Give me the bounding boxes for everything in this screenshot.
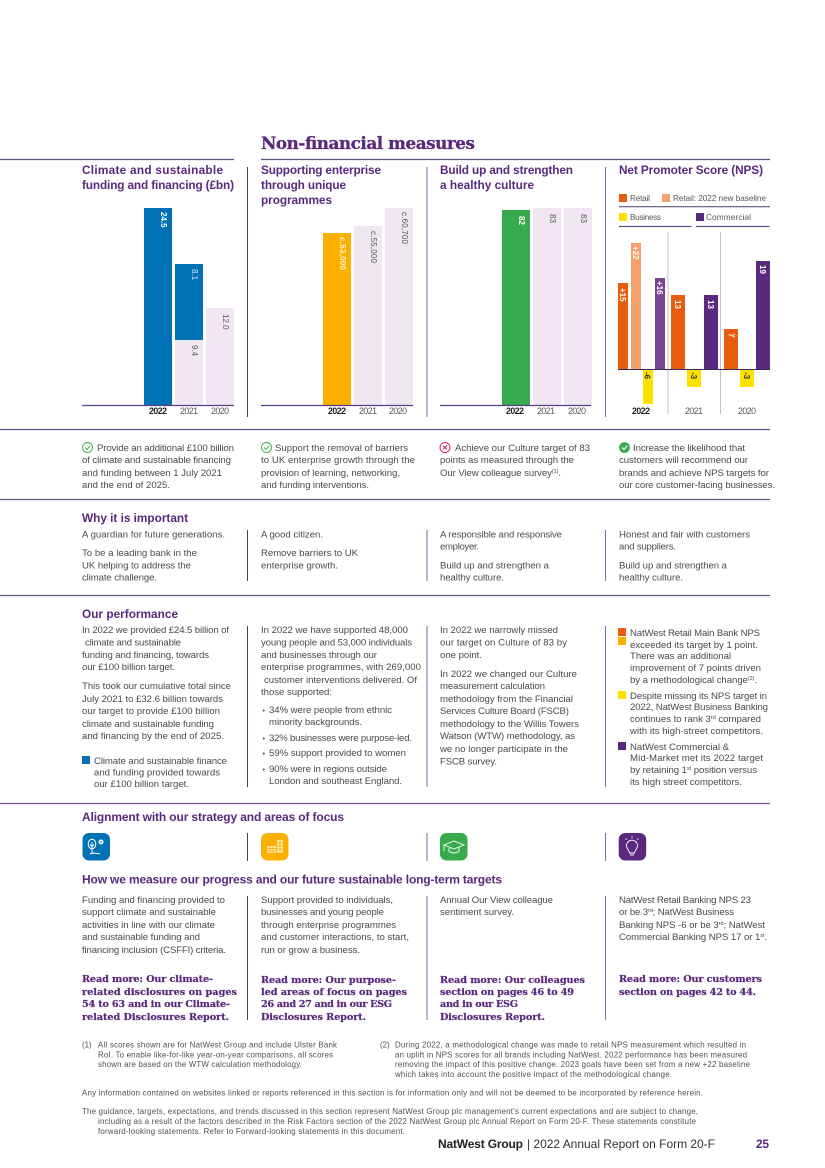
text: why NPS: Honest and fair with customers bbox=[619, 530, 750, 540]
bar chart: enterprise: 2022 bbox=[328, 406, 346, 416]
text: performance NPS: Mid-Market met its 2022 target bbox=[630, 753, 763, 764]
read more: climate: related Disclosures Report. bbox=[82, 1012, 229, 1023]
bar chart: climate funding bbox=[82, 208, 234, 416]
target: culture: Achieve our Culture target of 83 bbox=[455, 443, 590, 454]
text: why NPS: and suppliers. bbox=[619, 542, 676, 552]
bar chart: enterprise: c.60,700 bbox=[400, 212, 409, 245]
panel: culture chart bbox=[440, 163, 592, 416]
column: measure climate: support climate and sustainable bbox=[82, 907, 216, 918]
bar chart: NPS bbox=[618, 232, 770, 416]
legend: climate finance: our £100 billion target. bbox=[94, 779, 189, 790]
heading: culture: Build up and strengthen bbox=[440, 163, 573, 177]
heading: alignment: Alignment with our strategy and areas of focus bbox=[82, 810, 344, 824]
target: NPS bbox=[619, 442, 775, 491]
bar chart: climate funding: 24.5 bbox=[159, 212, 168, 228]
text: performance NPS: . bbox=[754, 675, 757, 686]
read more: customers: section on pages 42 to 44. bbox=[619, 987, 756, 998]
read more: climate: 54 to 63 and in our Climate- bbox=[82, 999, 230, 1010]
target: culture: . bbox=[558, 468, 561, 479]
target: enterprise bbox=[261, 442, 415, 491]
text: performance enterprise: • bbox=[262, 708, 266, 715]
column: measure climate: activities in line with our climate bbox=[82, 920, 215, 931]
footer bbox=[438, 1137, 769, 1151]
column: measure climate bbox=[82, 895, 238, 1023]
column: measure culture bbox=[440, 895, 586, 1023]
text: performance enterprise: and businesses through our bbox=[261, 650, 378, 661]
bar chart: culture: 83 bbox=[579, 214, 588, 223]
text: why enterprise: enterprise growth. bbox=[261, 560, 338, 572]
target: NPS: customers will recommend our bbox=[619, 455, 749, 466]
text: performance NPS: rd bbox=[711, 715, 716, 721]
bar chart: NPS: -3 bbox=[689, 372, 698, 380]
read more: culture: and in our ESG bbox=[440, 999, 518, 1010]
bar chart: climate funding: 12.0 bbox=[221, 314, 230, 330]
read more: enterprise: Read more: Our purpose- bbox=[261, 975, 396, 986]
bar chart: NPS: 2022 bbox=[632, 406, 650, 416]
footnote 2: which takes into account the positive impact of the methodological change. bbox=[394, 1070, 672, 1079]
text: why climate: climate challenge. bbox=[82, 572, 157, 584]
column: measure NPS: ; NatWest Business bbox=[653, 907, 734, 918]
target: climate: of climate and sustainable financing bbox=[82, 455, 231, 466]
bar chart: culture: 2021 bbox=[537, 406, 555, 416]
text: why culture: A responsible and responsive bbox=[440, 530, 562, 540]
bar chart: culture: 2022 bbox=[506, 406, 524, 416]
bar chart: NPS: 2021 bbox=[685, 406, 703, 416]
text: why culture bbox=[440, 530, 562, 584]
heading: culture bbox=[440, 163, 573, 192]
text: performance climate: In 2022 we provided £24.5 billion of bbox=[82, 625, 229, 636]
icon: tick outline bbox=[262, 442, 272, 452]
bar chart: NPS: 13 bbox=[706, 300, 715, 309]
bar chart: NPS: 13 bbox=[673, 300, 682, 309]
text: performance enterprise: • bbox=[262, 767, 266, 774]
footnote 2: During 2022, a methodological change was made to retail NPS measurement which resulted in bbox=[395, 1041, 746, 1050]
read more: customers bbox=[619, 974, 763, 998]
text: performance NPS: 2022, NatWest Business Banking bbox=[630, 702, 768, 713]
bar chart: NPS: +15 bbox=[618, 288, 627, 302]
text: performance culture: In 2022 we changed our Culture bbox=[440, 669, 577, 680]
read more: customers: Read more: Our customers bbox=[619, 974, 763, 985]
column: measure NPS: Banking NPS -6 or be 3 bbox=[619, 920, 719, 931]
chart legend: Retail bbox=[630, 194, 650, 203]
bar chart: culture: 2020 bbox=[568, 406, 586, 416]
text: why culture: healthy culture. bbox=[440, 572, 504, 584]
footnote 2: an uplift in NPS scores for all brands including NatWest. 2022 performance has been measured bbox=[395, 1050, 747, 1060]
bar chart: climate funding: 2020 bbox=[211, 406, 229, 416]
text: why enterprise: Remove barriers to UK bbox=[261, 548, 359, 559]
bar chart: culture: 82 bbox=[517, 216, 526, 225]
column: measure enterprise: Support provided to individuals, bbox=[261, 895, 393, 906]
target: NPS: brands and achieve NPS targets for bbox=[619, 468, 770, 479]
text: performance climate bbox=[82, 625, 231, 790]
panel: climate chart bbox=[82, 163, 234, 416]
column: measure NPS: . bbox=[764, 932, 767, 943]
footnotes bbox=[82, 1041, 751, 1136]
column: measure NPS: ; NatWest bbox=[723, 920, 765, 931]
column: measure NPS: Commercial Banking NPS 17 or 1 bbox=[619, 932, 760, 943]
target: climate bbox=[82, 442, 234, 491]
text: performance culture: FSCB survey. bbox=[440, 757, 497, 768]
text: performance culture: methodology to the Willis Towers bbox=[440, 719, 579, 730]
forward-looking statement bbox=[82, 1107, 698, 1136]
read more: climate: Read more: Our climate- bbox=[82, 974, 213, 985]
bar chart: enterprise: 2021 bbox=[359, 406, 377, 416]
target: climate: and funding between 1 July 2021 bbox=[82, 468, 222, 479]
text: performance NPS: by retaining 1 bbox=[630, 765, 687, 776]
footnote 2: removing the impact of this positive change. 2023 goals have been set from a new +22 baseline bbox=[395, 1060, 751, 1069]
read more: enterprise: led areas of focus on pages bbox=[261, 987, 408, 998]
read more: climate: related disclosures on pages bbox=[82, 987, 238, 998]
bar chart: culture bbox=[440, 208, 592, 416]
text: performance climate: This took our cumulative total since bbox=[82, 681, 231, 692]
target: enterprise: Support the removal of barriers bbox=[275, 443, 408, 454]
text: performance culture bbox=[439, 625, 579, 768]
text: why NPS: Build up and strengthen a bbox=[619, 560, 728, 572]
text: performance climate: and financing by the end of 2025. bbox=[82, 731, 224, 742]
heading: climate bbox=[82, 163, 234, 192]
text: why climate: A guardian for future generations. bbox=[82, 530, 225, 540]
text: performance culture: we no longer participate in the bbox=[439, 744, 568, 755]
icon: tick filled bbox=[619, 442, 630, 453]
icon: customers light bulb bbox=[619, 833, 646, 860]
horizontal rules bbox=[0, 160, 770, 804]
footnote 2: (2) bbox=[380, 1041, 390, 1050]
icon: tick outline bbox=[82, 442, 92, 452]
column: measure enterprise: businesses and young people bbox=[261, 907, 384, 918]
target: climate: Provide an additional £100 billion bbox=[97, 443, 234, 454]
text: performance enterprise bbox=[261, 625, 421, 787]
heading: enterprise: through unique bbox=[261, 178, 346, 192]
bar chart: climate funding: 2022 bbox=[149, 406, 167, 416]
text: performance climate: July 2021 to £32.6 billion towards bbox=[82, 694, 223, 705]
bar chart: climate funding: 9.4 bbox=[190, 345, 199, 357]
column: measure culture: Annual Our View colleague bbox=[440, 895, 553, 906]
footnote 1 bbox=[82, 1041, 337, 1069]
heading: why it is important: Why it is important bbox=[82, 511, 188, 525]
text: why NPS: healthy culture. bbox=[619, 572, 683, 584]
text: performance culture: Services Culture Board (FSCB) bbox=[440, 706, 569, 717]
target: culture bbox=[440, 442, 590, 479]
text: performance enterprise: customer interventions delivered. Of bbox=[264, 675, 417, 686]
read more: culture: Read more: Our colleagues bbox=[440, 975, 586, 986]
text: performance enterprise: • bbox=[262, 751, 266, 758]
heading: culture: a healthy culture bbox=[440, 178, 534, 192]
text: performance NPS: NatWest Commercial & bbox=[630, 742, 730, 753]
text: performance enterprise: 59% support provided to women bbox=[269, 748, 406, 759]
text: performance culture: Watson (WTW) methodology, as bbox=[440, 731, 575, 742]
bar chart: enterprise: c.53,000 bbox=[338, 237, 347, 271]
column dividers bbox=[248, 167, 606, 1020]
column: measure culture: sentiment survey. bbox=[440, 907, 514, 918]
disclaimer: Any information contained on websites linked or reports referenced in this section is for information only and will not be deemed to be incorporated by reference herein. bbox=[82, 1089, 703, 1098]
column: measure enterprise bbox=[261, 895, 409, 1023]
column: measure climate: Funding and financing provided to bbox=[82, 895, 225, 906]
column: measure NPS: st bbox=[760, 933, 765, 939]
heading: enterprise bbox=[261, 163, 381, 207]
column: measure enterprise: and customer interactions, to start, bbox=[261, 932, 409, 943]
bar chart: NPS: +16 bbox=[655, 281, 664, 295]
forward-looking statement: forward-looking statements. Refer to Forward-looking statements in this document. bbox=[98, 1127, 405, 1136]
column: measure enterprise: run or grow a business. bbox=[261, 945, 360, 956]
column: measure climate: and sustainable funding and bbox=[82, 932, 200, 943]
text: performance NPS: exceeded its target by 1 point. bbox=[630, 640, 758, 651]
text: performance culture: our target on Culture of 83 by bbox=[440, 637, 567, 648]
forward-looking statement: including as a result of the factors described in the Risk Factors section of the 2022 NatWest Group plc Annual Report on Form 20-F. These statements constitute bbox=[98, 1117, 697, 1126]
column: measure NPS: NatWest Retail Banking NPS 23 bbox=[619, 895, 751, 906]
target: NPS: Increase the likelihood that bbox=[633, 443, 745, 454]
text: performance climate: climate and sustainable bbox=[85, 637, 181, 648]
footer: NatWest Group bbox=[438, 1137, 523, 1151]
text: performance NPS: its high street competitors. bbox=[630, 777, 742, 788]
bar chart: culture: 83 bbox=[548, 214, 557, 223]
title: Non-financial measures bbox=[261, 133, 475, 153]
legend: climate finance bbox=[82, 756, 227, 790]
text: why climate: UK helping to address the bbox=[82, 560, 191, 572]
column: measure climate: financing inclusion (CSFFI) criteria. bbox=[82, 945, 226, 956]
heading: climate: funding and financing (£bn) bbox=[82, 178, 234, 192]
legend: climate finance: and funding provided towards bbox=[94, 768, 220, 779]
read more: enterprise: Disclosures Report. bbox=[261, 1012, 366, 1023]
panel: how we measure bbox=[82, 872, 767, 1023]
heading: enterprise: programmes bbox=[261, 193, 332, 207]
bar chart: NPS: -3 bbox=[742, 372, 751, 380]
text: performance NPS: There was an additional bbox=[630, 651, 731, 662]
read more: enterprise bbox=[261, 975, 408, 1023]
bar chart: climate funding: 8.1 bbox=[190, 269, 199, 281]
target: climate: and the end of 2025. bbox=[82, 480, 170, 491]
target: NPS: our core customer-facing businesses. bbox=[619, 480, 775, 491]
target: culture: (1) bbox=[552, 469, 559, 475]
text: performance NPS: (2) bbox=[748, 676, 755, 682]
read more: culture: section on pages 46 to 49 bbox=[440, 987, 574, 998]
read more: enterprise: 26 and 27 and in our ESG bbox=[261, 999, 392, 1010]
text: performance enterprise: those supported: bbox=[261, 687, 332, 698]
text: performance enterprise: 34% were people from ethnic bbox=[269, 705, 392, 716]
column: measure enterprise: through enterprise programmes bbox=[261, 920, 396, 931]
text: performance culture: In 2022 we narrowly missed bbox=[440, 625, 558, 636]
text: performance enterprise: In 2022 we have supported 48,000 bbox=[261, 625, 408, 636]
text: performance climate: our £100 billion target. bbox=[82, 662, 175, 673]
text: why NPS bbox=[619, 530, 750, 584]
target: enterprise: to UK enterprise growth through the bbox=[261, 455, 415, 466]
text: performance NPS: Despite missing its NPS target in bbox=[630, 691, 767, 702]
chart legend: Business bbox=[630, 213, 661, 222]
text: why climate: To be a leading bank in the bbox=[82, 548, 197, 559]
forward-looking statement: The guidance, targets, expectations, and trends discussed in this section represent NatWest Group plc management’s current expectations and are subject to change, bbox=[82, 1107, 698, 1116]
icon: cross outline bbox=[440, 442, 450, 452]
heading: our performance: Our performance bbox=[82, 607, 178, 621]
footnote 1: RoI. To enable like-for-like year-on-year comparisons, all scores bbox=[98, 1050, 333, 1060]
bar chart: enterprise: c.55,000 bbox=[369, 231, 378, 264]
text: why enterprise bbox=[261, 530, 359, 572]
text: performance enterprise: young people and 53,000 individuals bbox=[261, 637, 412, 648]
read more: culture: Disclosures Report. bbox=[440, 1012, 545, 1023]
text: performance NPS: st bbox=[687, 766, 692, 772]
panel: enterprise chart bbox=[261, 163, 413, 416]
text: performance culture: methodology from the Financial bbox=[440, 694, 573, 705]
column: measure NPS: rd bbox=[719, 921, 724, 927]
bar chart: NPS: +22 bbox=[631, 246, 640, 260]
text: performance enterprise: minority backgrounds. bbox=[269, 717, 362, 728]
text: performance climate: our target to provide £100 billion bbox=[82, 706, 220, 717]
text: performance NPS: continues to rank 3 bbox=[630, 714, 711, 725]
bar chart: NPS: 7 bbox=[726, 333, 736, 338]
bar chart: NPS: -6 bbox=[642, 372, 652, 380]
heading: climate: Climate and sustainable bbox=[82, 163, 223, 177]
panel: NPS chart bbox=[618, 163, 770, 416]
bar chart: enterprise bbox=[261, 208, 413, 416]
chart legend: Retail: 2022 new baseline bbox=[673, 194, 766, 203]
icon: climate tree and gear bbox=[82, 833, 110, 860]
icon: enterprise buildings bbox=[261, 833, 288, 860]
read more: climate bbox=[82, 974, 238, 1023]
target: culture: points as measured through the bbox=[440, 455, 574, 466]
chart legend bbox=[619, 194, 770, 226]
column: measure NPS: or be 3 bbox=[619, 907, 648, 918]
footnote 1: (1) bbox=[82, 1041, 92, 1050]
heading: NPS: Net Promoter Score (NPS) bbox=[619, 163, 763, 177]
text: performance enterprise: • bbox=[262, 736, 266, 743]
footnote 2 bbox=[380, 1041, 751, 1079]
footnote 1: shown are based on the WTW calculation methodology. bbox=[98, 1060, 302, 1069]
text: performance culture: measurement calculation bbox=[440, 681, 545, 692]
text: performance NPS: position versus bbox=[691, 765, 757, 776]
target: enterprise: and funding interventions. bbox=[261, 480, 369, 491]
footer: | 2022 Annual Report on Form 20-F bbox=[527, 1137, 715, 1151]
text: performance NPS bbox=[618, 628, 768, 788]
page number: 25 bbox=[756, 1137, 769, 1151]
heading: enterprise: Supporting enterprise bbox=[261, 163, 381, 177]
panel: targets bbox=[82, 442, 775, 491]
text: why culture: employer. bbox=[440, 542, 479, 552]
read more: culture bbox=[440, 975, 586, 1023]
icon: culture graduation cap bbox=[440, 833, 468, 860]
text: performance enterprise: enterprise programmes, with 269,000 bbox=[261, 662, 421, 673]
footnote 1: All scores shown are for NatWest Group and include Ulster Bank bbox=[98, 1041, 337, 1050]
text: performance climate: funding and financing, towards bbox=[82, 650, 209, 661]
text: performance climate: climate and sustainable funding bbox=[82, 719, 214, 730]
column: measure NPS: rd bbox=[648, 908, 653, 914]
text: performance NPS: compared bbox=[716, 714, 761, 725]
bar chart: NPS: 2020 bbox=[738, 406, 756, 416]
text: why culture: Build up and strengthen a bbox=[440, 560, 550, 572]
text: why enterprise: A good citizen. bbox=[261, 530, 323, 540]
panel: our performance bbox=[82, 607, 768, 790]
target: culture: Our View colleague survey bbox=[440, 468, 552, 479]
text: performance NPS: improvement of 7 points driven bbox=[630, 663, 761, 674]
column: measure NPS bbox=[619, 895, 767, 998]
panel: why it is important bbox=[82, 511, 750, 584]
text: performance NPS: NatWest Retail Main Bank NPS bbox=[630, 628, 760, 639]
text: performance culture: one point. bbox=[440, 650, 482, 661]
heading: how we measure: How we measure our progress and our future sustainable long-term targets bbox=[82, 872, 502, 886]
bar chart: enterprise: 2020 bbox=[389, 406, 407, 416]
text: performance enterprise: 90% were in regions outside bbox=[269, 764, 387, 775]
text: performance NPS: by a methodological change bbox=[630, 675, 748, 686]
text: performance enterprise: London and southeast England. bbox=[269, 776, 402, 787]
bar chart: climate funding: 2021 bbox=[180, 406, 198, 416]
bar chart: NPS: 19 bbox=[758, 265, 767, 274]
legend: climate finance: Climate and sustainable finance bbox=[94, 756, 227, 767]
chart legend: Commercial bbox=[706, 213, 751, 222]
text: performance NPS: with its high-street competitors. bbox=[629, 726, 763, 737]
target: enterprise: provision of learning, networking, bbox=[261, 468, 400, 479]
text: why climate bbox=[82, 530, 225, 584]
text: performance enterprise: 32% businesses were purpose-led. bbox=[269, 733, 412, 744]
